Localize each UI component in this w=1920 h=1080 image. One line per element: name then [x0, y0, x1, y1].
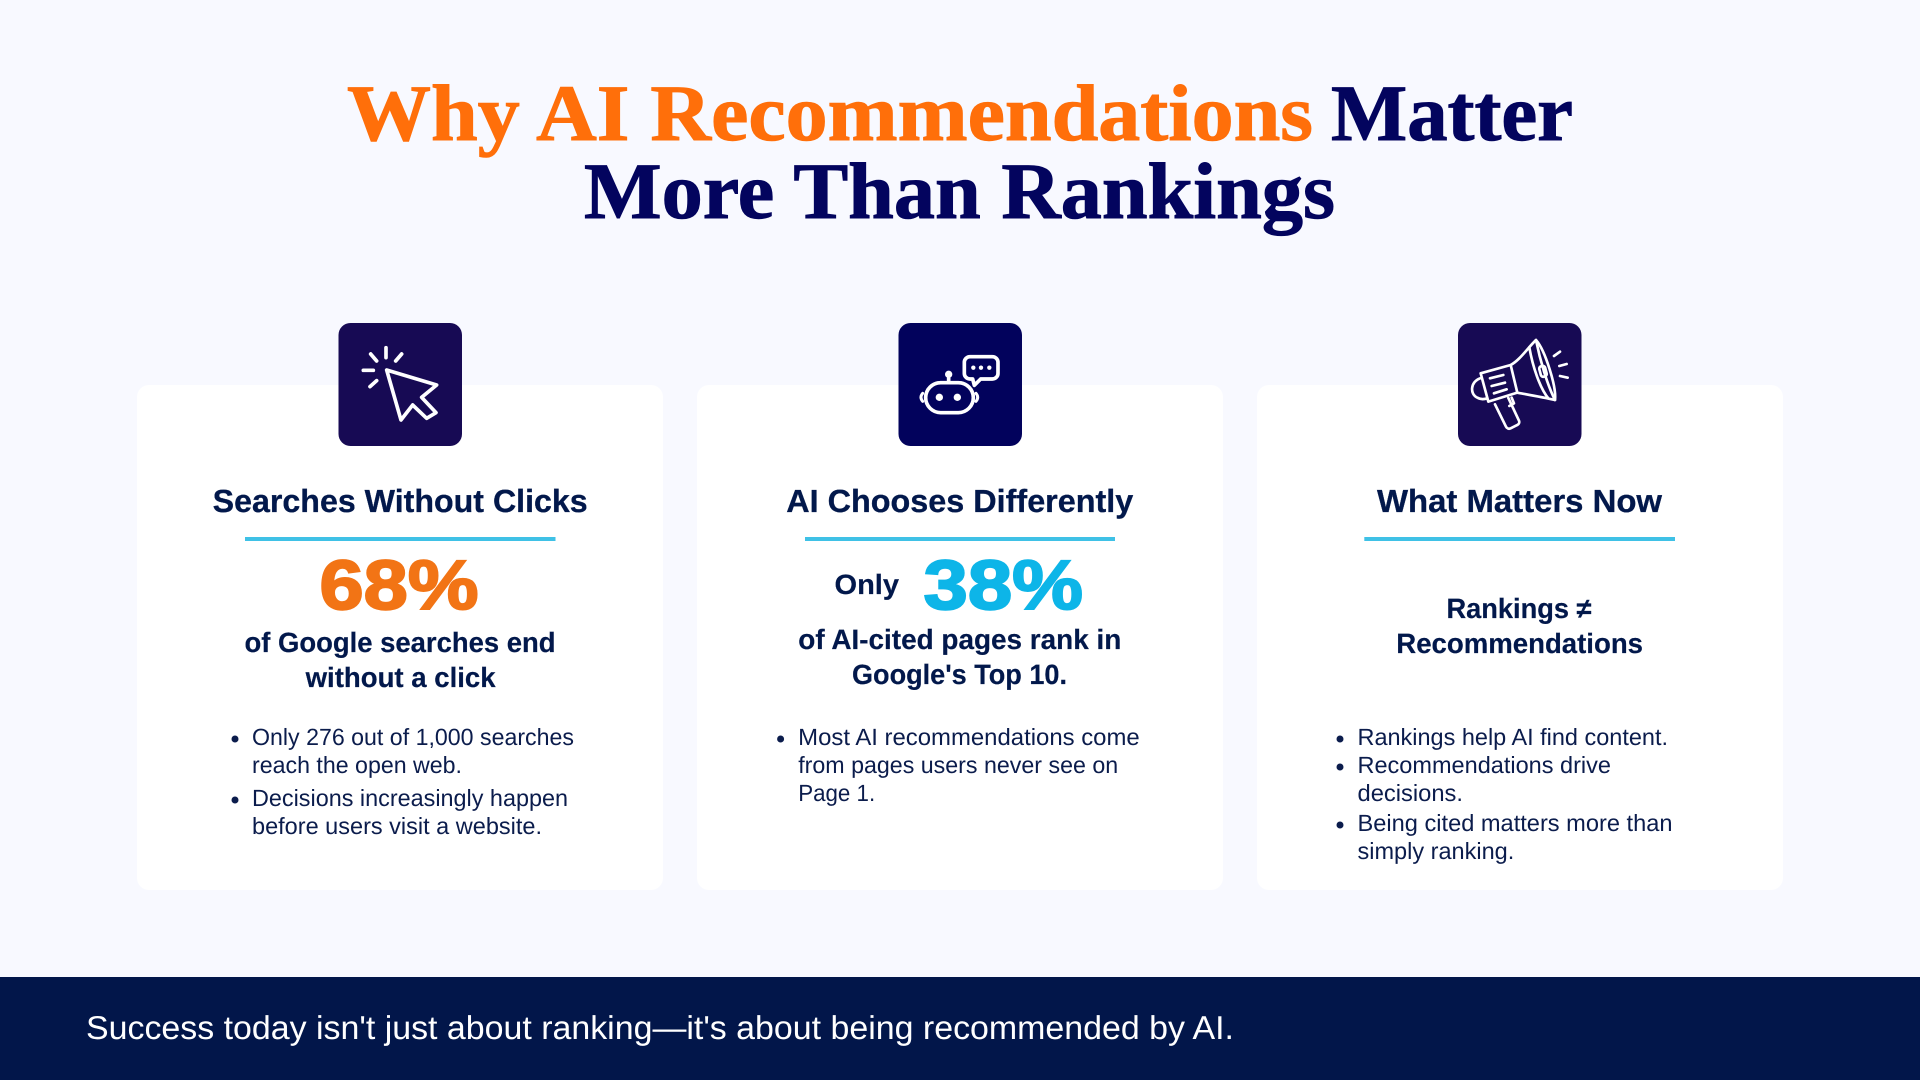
icon: cursor click: [338, 323, 462, 446]
panel: what matters now: [1257, 323, 1783, 890]
stat description: [244, 627, 556, 693]
stat description: of AI-cited pages rank in: [798, 624, 1121, 655]
icon: robot with chat bubble: [898, 323, 1022, 446]
divider: [805, 537, 1115, 541]
bullet list: [1336, 724, 1672, 864]
bullet list: from pages users never see on: [798, 752, 1118, 778]
bullet list: decisions.: [1358, 780, 1463, 806]
bullet list: reach the open web.: [252, 752, 462, 778]
footer text: Success today isn't just about ranking—it's about being recommended by AI.: [86, 1009, 1234, 1046]
title: Matter: [1331, 70, 1573, 158]
bullet list: simply ranking.: [1358, 838, 1514, 864]
card background: [1257, 385, 1783, 890]
divider: [1364, 537, 1675, 541]
bullet list: Being cited matters more than: [1358, 810, 1672, 836]
title: More Than Rankings: [584, 148, 1335, 236]
bullet list: [777, 724, 1140, 806]
bullet list: [232, 724, 574, 839]
stat description: of Google searches end: [244, 627, 556, 658]
bullet list: Decisions increasingly happen: [252, 785, 568, 811]
heading: Searches Without Clicks: [213, 483, 588, 519]
card background: [697, 385, 1223, 890]
stat description: [798, 624, 1121, 690]
divider: [245, 537, 556, 541]
card background: [137, 385, 663, 890]
footer banner: [0, 977, 1920, 1080]
key message: [1396, 593, 1643, 659]
stat description: without a click: [305, 662, 496, 693]
bullet list: Page 1.: [798, 780, 875, 806]
key message: Recommendations: [1396, 628, 1643, 659]
panel: ai chooses differently: [697, 323, 1223, 890]
heading: What Matters Now: [1377, 483, 1662, 519]
label: only: Only: [834, 569, 899, 600]
icon: megaphone: [1458, 323, 1582, 446]
stat description: Google's Top 10.: [852, 659, 1067, 690]
panel: searches without clicks: [137, 323, 663, 890]
bullet list: Most AI recommendations come: [798, 724, 1140, 750]
title: [347, 70, 1573, 236]
stat: 38%: 38%: [924, 546, 1083, 624]
title: Why AI Recommendations: [347, 70, 1313, 158]
bullet list: Only 276 out of 1,000 searches: [252, 724, 574, 750]
bullet list: Recommendations drive: [1358, 752, 1611, 778]
bullet list: before users visit a website.: [252, 813, 542, 839]
heading: AI Chooses Differently: [786, 483, 1134, 519]
bullet list: Rankings help AI find content.: [1358, 724, 1668, 750]
key message: Rankings ≠: [1446, 593, 1592, 624]
stat: 68%: 68%: [320, 546, 478, 624]
